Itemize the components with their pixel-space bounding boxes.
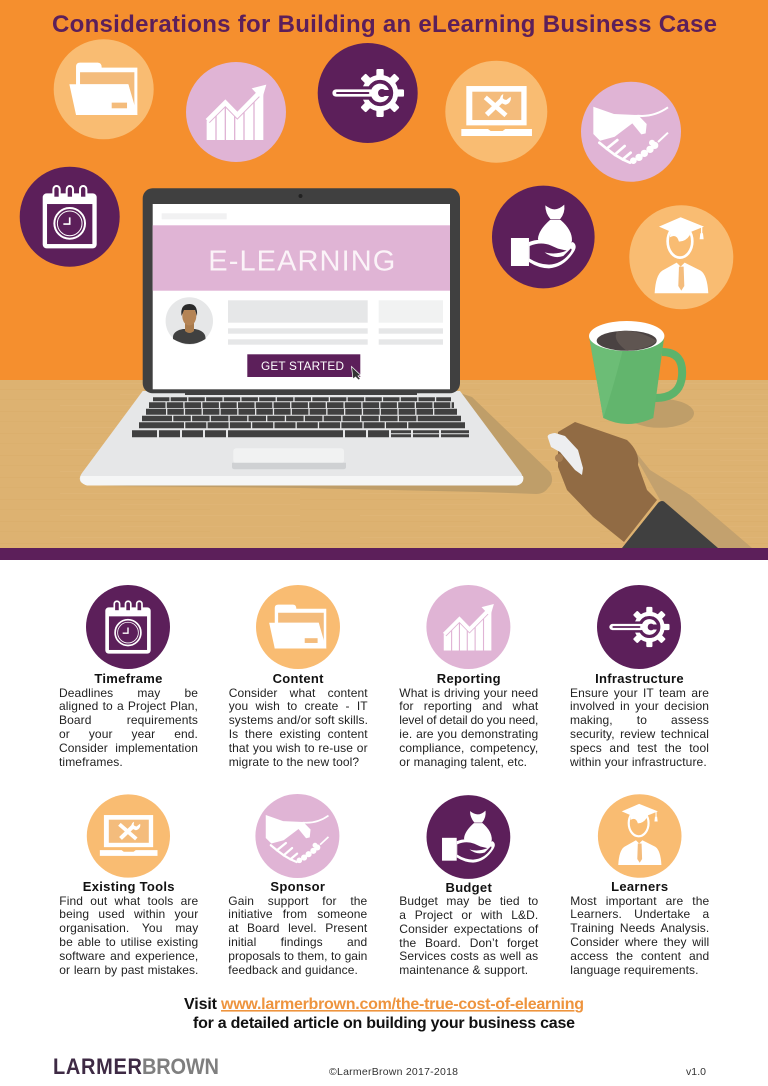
card: Learners [570, 794, 710, 977]
card: Reporting: or managing talent, etc. [399, 755, 527, 769]
card: Existing Tools: or learn by past mistakes. [59, 963, 198, 977]
footer call to action: for a detailed article on building your business case [193, 1015, 575, 1032]
card: Infrastructure: making, to assess [570, 713, 709, 727]
card: Budget: a Project or with L&D. [399, 908, 538, 922]
card: Learners: Learners [611, 879, 668, 894]
card: Budget: the Board. Don’t forget [399, 936, 538, 950]
footer call to action: Visit [184, 996, 218, 1013]
hand shadow [626, 440, 752, 548]
card: Timeframe: timeframes. [59, 755, 123, 769]
footer call to action: www.larmerbrown.com/the-true-cost-of-elearning [220, 996, 584, 1013]
card: Content: systems and/or soft skills. [229, 713, 368, 727]
card: Infrastructure: specs and test the tool [570, 741, 709, 755]
card: Timeframe: Board requirements [59, 713, 198, 727]
card: Existing Tools: Existing Tools [83, 879, 175, 894]
card: Learners: Training Needs Analysis. [570, 921, 709, 935]
card: Reporting: Reporting [437, 671, 501, 686]
card: Existing Tools: be able to utilise existing [59, 935, 198, 949]
card: Sponsor: feedback and guidance. [228, 963, 358, 977]
laptop: GET STARTED [261, 359, 344, 373]
card: Learners: language requirements. [570, 963, 699, 977]
card: Timeframe: Consider implementation [59, 741, 198, 755]
icon: calendar [20, 167, 120, 267]
card: Budget: maintenance & support. [399, 963, 528, 977]
version: v1.0 [686, 1066, 706, 1078]
icon: money bag [492, 186, 595, 288]
card: Content: you wish to create - IT [229, 699, 368, 713]
card: Reporting: for reporting and what [399, 699, 538, 713]
card: Reporting [399, 585, 538, 769]
card: Content: Consider what content [229, 686, 368, 700]
icon: laptop tools [445, 61, 547, 163]
card: Infrastructure: involved in your decision [570, 699, 709, 713]
card: Budget [399, 795, 538, 977]
card: Content: that you wish to re-use or [229, 741, 368, 755]
card: Sponsor: at Board level. Present [228, 921, 367, 935]
icon: folder [54, 39, 154, 139]
card: Timeframe: or your year end. [59, 727, 198, 741]
icon: graduate [629, 205, 733, 309]
card: Existing Tools [59, 794, 198, 977]
logo [53, 1055, 219, 1079]
card: Timeframe: Deadlines may be [59, 686, 198, 700]
card: Learners: Most important are the [570, 894, 709, 908]
laptop [80, 188, 523, 486]
card: Budget: Budget may be tied to [399, 894, 538, 908]
card: Sponsor: proposals to them, to gain [228, 949, 367, 963]
card: Content: Is there existing content [229, 727, 368, 741]
card: Infrastructure: security, review technical [570, 727, 709, 741]
keyboard [132, 399, 471, 434]
card: Learners: access the content and [570, 949, 709, 963]
card: Sponsor: initial findings and [228, 935, 367, 949]
mug shadow [626, 399, 694, 428]
card: Content [228, 585, 368, 769]
card: Infrastructure: within your infrastructure. [570, 755, 707, 769]
card: Sponsor: Sponsor [270, 879, 325, 894]
card: Infrastructure: Ensure your IT team are [570, 686, 709, 700]
card: Infrastructure: Infrastructure [595, 671, 684, 686]
card: Content: Content [273, 671, 324, 686]
wooden desk [0, 380, 768, 548]
logo: LARMER [53, 1055, 142, 1079]
logo: BROWN [142, 1055, 219, 1079]
card: Budget: Budget [446, 880, 492, 895]
card: Timeframe: Timeframe [94, 671, 163, 686]
card: Reporting: ie. are you demonstrating [399, 727, 538, 741]
card: Timeframe [59, 585, 198, 769]
purple band [0, 548, 768, 560]
card: Sponsor: Gain support for the [228, 894, 367, 908]
copyright: ©LarmerBrown 2017-2018 [329, 1066, 458, 1078]
laptop: E-LEARNING [208, 246, 395, 278]
icon: chart [186, 62, 286, 162]
card: Reporting: What is driving your need [399, 686, 538, 700]
card: Sponsor [228, 794, 368, 977]
card: Reporting: level of detail do you need, [399, 713, 538, 727]
icon: handshake [581, 82, 681, 182]
hand on mouse [548, 422, 718, 548]
icon: gear and wrench [318, 43, 418, 143]
card: Learners: Consider where they will [570, 935, 709, 949]
title: Considerations for Building an eLearning Business Case [52, 11, 717, 38]
footer call to action [184, 996, 584, 1032]
laptop shadow [100, 393, 552, 494]
card: Existing Tools: being used within your [59, 907, 198, 921]
card: Existing Tools: software and experience, [59, 949, 198, 963]
card: Infrastructure [570, 585, 709, 769]
orange background [0, 0, 768, 381]
card: Timeframe: aligned to a Project Plan, [59, 699, 198, 713]
coffee mug [589, 321, 682, 424]
card: Existing Tools: Find out what tools are [59, 894, 198, 908]
card: Budget: Services costs as well as [399, 949, 538, 963]
card: Learners: Learners. Undertake a [570, 907, 709, 921]
card: Budget: Consider expectations of [399, 922, 538, 936]
card: Sponsor: initiative from someone [228, 907, 367, 921]
card: Content: migrate to the new tool? [229, 755, 359, 769]
card: Existing Tools: organisation. You may [59, 921, 198, 935]
card: Reporting: compliance, competency, [399, 741, 538, 755]
